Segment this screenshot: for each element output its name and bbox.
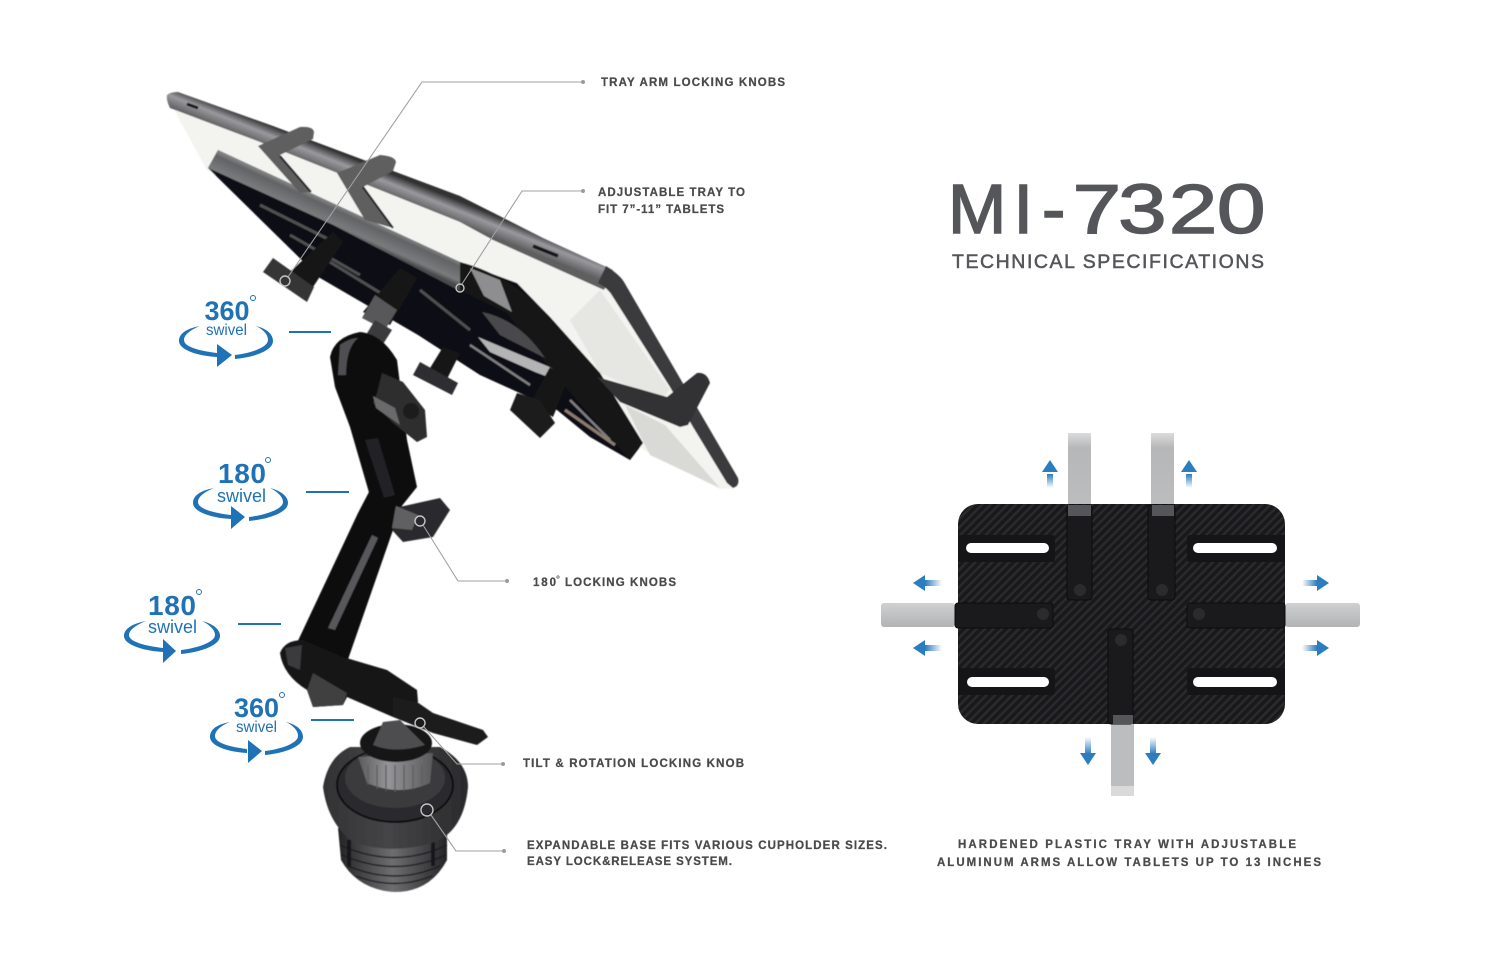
title — [948, 169, 1266, 248]
callout: 180 locking knobs: 180 — [533, 577, 556, 589]
swivel badge: 180 lower: swivel — [148, 617, 197, 637]
callout: 180 locking knobs: LOCKING KNOBS — [565, 577, 676, 589]
tray diagram — [881, 433, 1360, 796]
direction arrows — [913, 460, 1329, 765]
callout: tray arm locking knobs: TRAY ARM LOCKING KNOBS — [601, 77, 785, 89]
tray arm knobs — [263, 232, 568, 438]
carbon plate — [958, 504, 1285, 724]
tablet — [167, 92, 738, 489]
swivel badge: 360 upper: swivel — [206, 322, 247, 339]
product photo: tablet mount — [167, 92, 738, 892]
swivel badge: 360 lower: swivel — [236, 719, 277, 736]
callout: adjustable tray: FIT 7”-11” TABLETS — [598, 204, 724, 216]
articulated arm — [280, 320, 488, 745]
tablet clips — [258, 127, 396, 228]
tray description: ALUMINUM ARMS ALLOW TABLETS UP TO 13 INCHES — [937, 857, 1321, 869]
tray description — [937, 839, 1321, 869]
callout: adjustable tray — [598, 187, 745, 216]
cupholder base — [323, 720, 468, 892]
title: MI- — [948, 170, 1065, 248]
swivel badge: 360 lower — [210, 692, 354, 763]
swivel badge: 180 upper — [193, 458, 349, 529]
tray back with ribs — [208, 150, 643, 460]
slots — [958, 535, 1285, 695]
callout: tilt and rotation knob: TILT & ROTATION LOCKING KNOB — [523, 758, 744, 770]
subtitle: TECHNICAL SPECIFICATIONS — [952, 251, 1264, 273]
swivel badge: 180 upper: swivel — [217, 486, 266, 506]
callout: adjustable tray: ADJUSTABLE TRAY TO — [598, 187, 745, 199]
swivel badge: 360 lower: 360 — [234, 693, 279, 723]
callout: expandable base: EASY LOCK&RELEASE SYSTEM. — [527, 856, 732, 868]
swivel badge: 180 lower — [124, 590, 281, 663]
swivel badge: 360 upper — [179, 296, 331, 367]
tray hook — [597, 373, 710, 427]
callout: expandable base — [527, 840, 887, 868]
callout leader lines — [280, 80, 585, 853]
swivel badge: 180 upper: 180 — [218, 458, 266, 489]
sliders — [955, 505, 1285, 724]
aluminum arms — [881, 433, 1360, 796]
callout: expandable base: EXPANDABLE BASE FITS VARIOUS CUPHOLDER SIZES. — [527, 840, 887, 852]
title: 7320 — [1072, 169, 1266, 248]
tray description: HARDENED PLASTIC TRAY WITH ADJUSTABLE — [958, 839, 1296, 851]
swivel badge: 360 upper: 360 — [204, 296, 250, 326]
swivel badge: 180 lower: 180 — [148, 590, 196, 621]
